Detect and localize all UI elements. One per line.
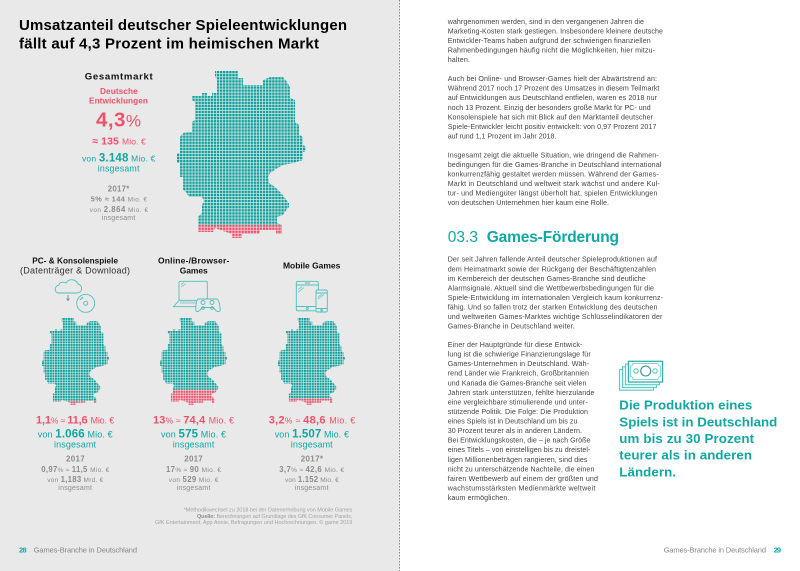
panel: Gesamtmarkt statistics: insgesamt [102, 215, 135, 222]
panel: mobile games statistics: 3,7% ≈ 42,6 Mio. € [279, 465, 344, 474]
panel: mobile games statistics: von 1.152 Mio. € [285, 475, 339, 484]
panel: mobile games statistics [269, 414, 355, 492]
text block: intro paragraphs: Insgesamt zeigt die aktuelle Situation, wie dringend die Rahmen- [448, 151, 659, 159]
panel: Gesamtmarkt statistics: 2017* [108, 185, 130, 194]
panel: Gesamtmarkt statistics: von 3.148 Mio. € [82, 153, 156, 165]
text block: main reasons column: eines Titels – von einstelligen bis zu dreistel- [448, 446, 591, 454]
panel: Gesamtmarkt statistics: von 2.864 Mio. € [90, 205, 148, 214]
chart: Germany dot map PC and consoles [42, 318, 109, 405]
text block: main reasons column: wachstumsstärksten Medienmärkte weltweit [447, 484, 595, 492]
text block: main reasons column: rend Länder wie Frankreich, Großbritannien [448, 370, 589, 378]
panel: PC and consoles statistics: 1,1% ≈ 11,6 Mio. € [36, 414, 114, 426]
text block: section introduction: Der seit Jahren fallende Anteil deutscher Spieleproduktionen auf [448, 256, 657, 264]
text block: section introduction [448, 256, 664, 331]
panel: Gesamtmarkt statistics: Deutsche [100, 86, 138, 96]
text block: main reasons column: stützende Politik. Die Folge: Die Produktion [448, 408, 588, 416]
text block: main reasons column: nicht zu unterschätzende Nachteile, die einen [448, 465, 594, 473]
text block: intro paragraphs: Konsolenspiele hat sich mit Blick auf den Marktanteil deutscher [448, 113, 654, 121]
panel: online and browser statistics: insgesamt [173, 440, 215, 450]
heading: PC and consoles [20, 256, 130, 276]
icon: tablet and phone [296, 281, 327, 312]
chart: Germany dot map total market [177, 71, 306, 238]
title: fällt auf 4,3 Prozent im heimischen Markt [19, 36, 319, 53]
panel: PC and consoles statistics: von 1.066 Mio. € [38, 429, 113, 441]
callout: production cost: Ländern. [619, 464, 676, 479]
text block: intro paragraphs: Entwickler-Teams haben aufgrund der schwierigen finanziellen [448, 37, 651, 45]
text block: intro paragraphs: Rahmenbedingungen häufig nicht die Möglichkeiten, hier mitzu- [448, 47, 656, 55]
icon: cloud download and disc [55, 280, 95, 312]
heading: online and browser games: Online-/Browser- [158, 255, 229, 265]
panel: PC and consoles statistics: insgesamt [58, 485, 92, 492]
text block: intro paragraphs: auf Entwicklungen aus Deutschland entfielen, waren es 2018 nur [448, 94, 658, 102]
text block: section introduction: im Kernbereich der deutschen Games-Branche sind deutliche [448, 275, 646, 283]
heading: online and browser games [158, 255, 229, 276]
text block: main reasons column: eines Spiels ist in Deutschland um bis zu [448, 418, 577, 426]
footer: right page number: Games-Branche in Deutschland [664, 545, 766, 554]
text block: main reasons column [447, 341, 598, 502]
panel: PC and consoles statistics [36, 414, 114, 492]
panel: online and browser statistics: 13% ≈ 74,4 Mio. € [153, 414, 234, 426]
text block: main reasons column: Jahren stark unterstützen, fehlte hierzulande [448, 389, 594, 397]
footer: left page number: 28 [19, 545, 27, 554]
panel: online and browser statistics: insgesamt [177, 485, 210, 492]
heading: section 03.3: Games-Förderung [487, 229, 619, 246]
text block: intro paragraphs: Marketing-Kosten stark gestiegen. Insbesondere kleinere deutsche [448, 28, 663, 36]
heading: PC and consoles: PC- & Konsolenspiele [32, 256, 118, 265]
callout: production cost: teurer als in anderen [619, 448, 752, 463]
text block: main reasons column: Bei Entwicklungskosten, die – je nach Größe [448, 437, 590, 445]
text block: main reasons column: kaum ermöglichen. [448, 494, 509, 502]
text block: intro paragraphs: wahrgenommen werden, sind in den vergangenen Jahren die [447, 18, 644, 26]
panel: left page background [0, 0, 400, 571]
text block: section introduction: fähig. Und so fallen trotz der starken Entwicklung des deutschen [448, 304, 657, 312]
callout: production cost: Die Produktion eines [619, 398, 752, 413]
panel: Gesamtmarkt statistics: Entwicklungen [89, 96, 148, 106]
panel: Gesamtmarkt statistics: 4,3% [96, 109, 141, 132]
text block: intro paragraphs: halten. [448, 56, 470, 64]
panel: PC and consoles statistics: 0,97% ≈ 11,5 Mio. € [41, 465, 110, 474]
panel: mobile games statistics: von 1.507 Mio. € [275, 429, 349, 441]
text block: intro paragraphs [447, 18, 663, 207]
panel: online and browser statistics: von 529 Mio. € [169, 475, 219, 484]
source footnote: GfK Entertainment, App Annie, Befragungen und Hochrechnungen. © game 2019 [155, 519, 352, 526]
heading: online and browser games: Games [180, 266, 208, 276]
text block: main reasons column: fairen Wettbewerb auf einem der größten und [448, 475, 598, 483]
heading: mobile games: Mobile Games [283, 260, 341, 270]
panel: Gesamtmarkt statistics: Gesamtmarkt [85, 71, 153, 82]
callout: production cost [619, 398, 777, 479]
text block: main reasons column: und Kanada die Games-Branche seit vielen [448, 379, 586, 387]
title: Umsatzanteil deutscher Spieleentwicklungen [19, 17, 347, 34]
panel: Gesamtmarkt statistics [82, 71, 156, 222]
panel: PC and consoles statistics: insgesamt [54, 440, 96, 450]
callout: production cost: Spiels ist in Deutschland [619, 414, 777, 429]
text block: intro paragraphs: von deutschen Unternehmen hier kaum eine Rolle. [448, 199, 609, 207]
text block: intro paragraphs: noch 13 Prozent. Einzig der besonders große Markt für PC- und [448, 104, 651, 112]
chart: Germany dot map mobile games [278, 318, 345, 405]
panel: mobile games statistics: insgesamt [291, 440, 333, 450]
panel: online and browser statistics: 2017 [184, 455, 203, 464]
panel: Gesamtmarkt statistics: insgesamt [98, 164, 140, 174]
text block: section introduction: Alarmsignale. Aktuell sind die Wettbewerbsbedingungen für die [448, 284, 654, 292]
text block: section introduction: Spiele-Entwicklung im internationalen Vergleich kaum konkurrenz- [448, 294, 664, 302]
text block: main reasons column: Einer der Hauptgründe für diese Entwick- [448, 341, 583, 349]
source footnote: Quelle: Berechnungen auf Grundlage des GfK Consumer Panels, [197, 514, 353, 520]
icon: laptop and gamepad [174, 281, 220, 312]
footer: left page number: Games-Branche in Deutschland [34, 545, 137, 554]
panel: mobile games statistics: 3,2% ≈ 48,6 Mio. € [269, 414, 355, 426]
text block: intro paragraphs: Spiele-Entwickler leicht positiv entwickelt: von 0,97 Prozent 2017 [448, 123, 656, 131]
text block: intro paragraphs: Auch bei Online- und Browser-Games hielt der Abwärtstrend an: [448, 75, 657, 83]
source footnote [155, 508, 353, 526]
footer: right page number: 29 [774, 545, 781, 554]
panel: online and browser statistics: von 575 Mio. € [161, 429, 226, 441]
heading: section 03.3: 03.3 [448, 229, 478, 246]
text block: section introduction: und weltweiten Games-Marktes wichtige Schlüsselindikatoren der [448, 313, 663, 321]
icon: stack of banknotes [620, 361, 662, 390]
chart: Germany dot map online and browser [160, 318, 227, 405]
panel: online and browser statistics: 17% ≈ 90 Mio. € [166, 465, 221, 474]
text block: intro paragraphs: Markt in Deutschland und weltweit stark wächst und andere Kul- [448, 180, 660, 188]
panel: mobile games statistics: insgesamt [295, 485, 328, 492]
text block: intro paragraphs: tur- und Mediengüter längst überholt hat, spielen Entwicklungen [448, 190, 657, 198]
text block: section introduction: Games-Branche in Deutschland weiter. [448, 323, 575, 331]
text block: main reasons column: ligen Millionenbeträgen rangieren, sind dies [448, 456, 588, 464]
panel: PC and consoles statistics: von 1,183 Mrd. € [47, 475, 104, 484]
title [19, 17, 347, 53]
text block: main reasons column: lung ist die schwierige Finanzierungslage für [448, 351, 591, 359]
text block: main reasons column: eine vergleichbare stimulierende und unter- [448, 398, 588, 406]
panel: mobile games statistics: 2017* [301, 455, 324, 464]
panel: online and browser statistics [153, 414, 234, 492]
text block: main reasons column: Games-Unternehmen in Deutschland. Wäh- [448, 360, 590, 368]
source footnote: *Methodikwechsel zu 2018 bei der Datenerhebung von Mobile Games [184, 508, 353, 514]
heading: PC and consoles: (Datenträger & Download) [20, 266, 130, 276]
text block: intro paragraphs: Während 2017 noch 17 Prozent des Umsatzes in diesem Teilmarkt [448, 85, 659, 93]
panel: Gesamtmarkt statistics: 5% ≈ 144 Mio. € [91, 195, 147, 204]
text block: intro paragraphs: konkurrenzfähig gestaltet werden müssen. Während der Games- [448, 170, 659, 178]
text block: section introduction: dem Heimatmarkt sowie der Rückgang der Beschäftigtenzahlen [448, 265, 656, 273]
text block: intro paragraphs: bedingungen für die Games-Branche in Deutschland international [448, 161, 662, 169]
text block: main reasons column: 30 Prozent teurer als in anderen Ländern. [448, 427, 582, 435]
text block: intro paragraphs: auf rund 1,1 Prozent im Jahr 2018. [448, 132, 556, 140]
callout: production cost: um bis zu 30 Prozent [619, 431, 755, 446]
panel: Gesamtmarkt statistics: ≈ 135 Mio. € [92, 135, 146, 147]
panel: PC and consoles statistics: 2017 [66, 455, 85, 464]
